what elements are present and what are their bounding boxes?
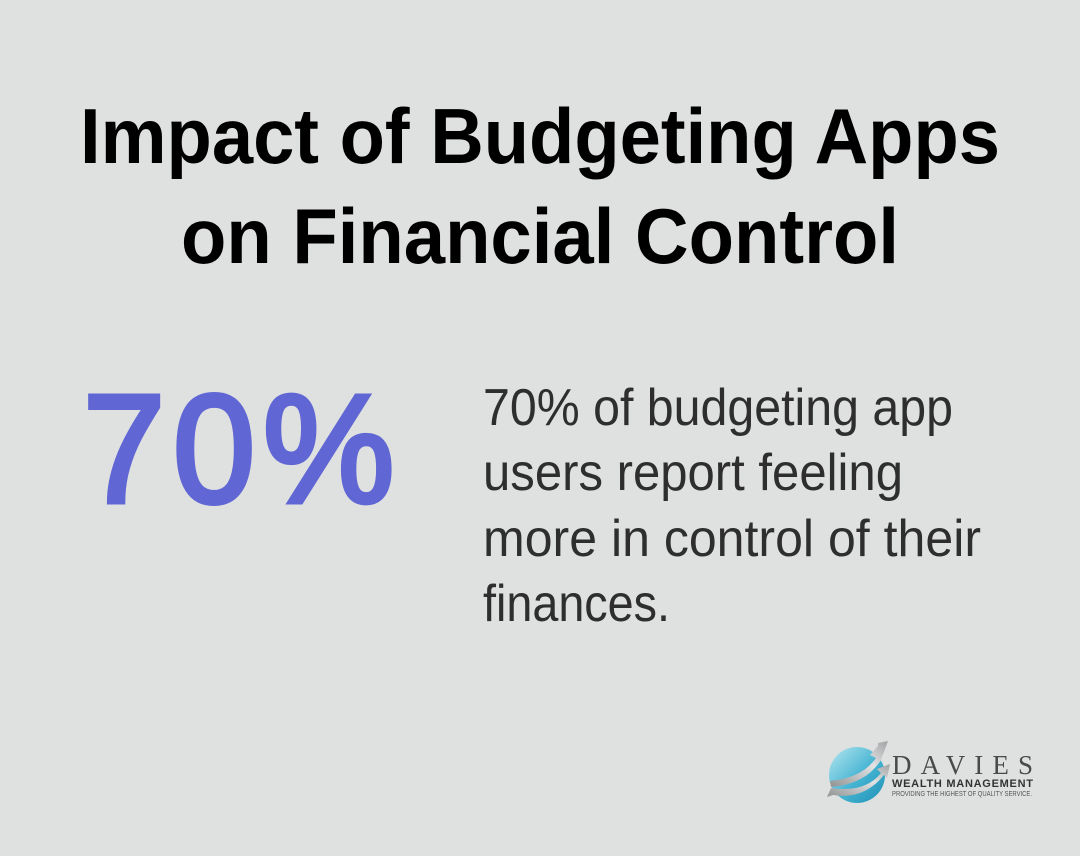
description text: users report feeling — [483, 444, 903, 502]
title: Impact of Budgeting Apps — [80, 92, 1000, 180]
big statistic — [83, 362, 394, 535]
big statistic: % — [263, 362, 394, 535]
description text: finances. — [483, 575, 670, 633]
big statistic: 0 — [173, 362, 255, 535]
big statistic: 7 — [83, 362, 165, 535]
title: on Financial Control — [181, 192, 899, 280]
wordmark subtitle: WEALTH MANAGEMENT — [892, 778, 1033, 790]
description text: 70% of budgeting app — [483, 379, 953, 437]
title — [80, 92, 1000, 280]
icon: globe with arrows — [827, 741, 890, 803]
logo: Davies Wealth Management — [827, 741, 1033, 803]
description text: more in control of their — [483, 510, 981, 568]
description text — [483, 379, 981, 633]
tagline: PROVIDING THE HIGHEST OF QUALITY SERVICE. — [892, 791, 1032, 798]
wordmark: DAVIES — [892, 750, 1033, 780]
